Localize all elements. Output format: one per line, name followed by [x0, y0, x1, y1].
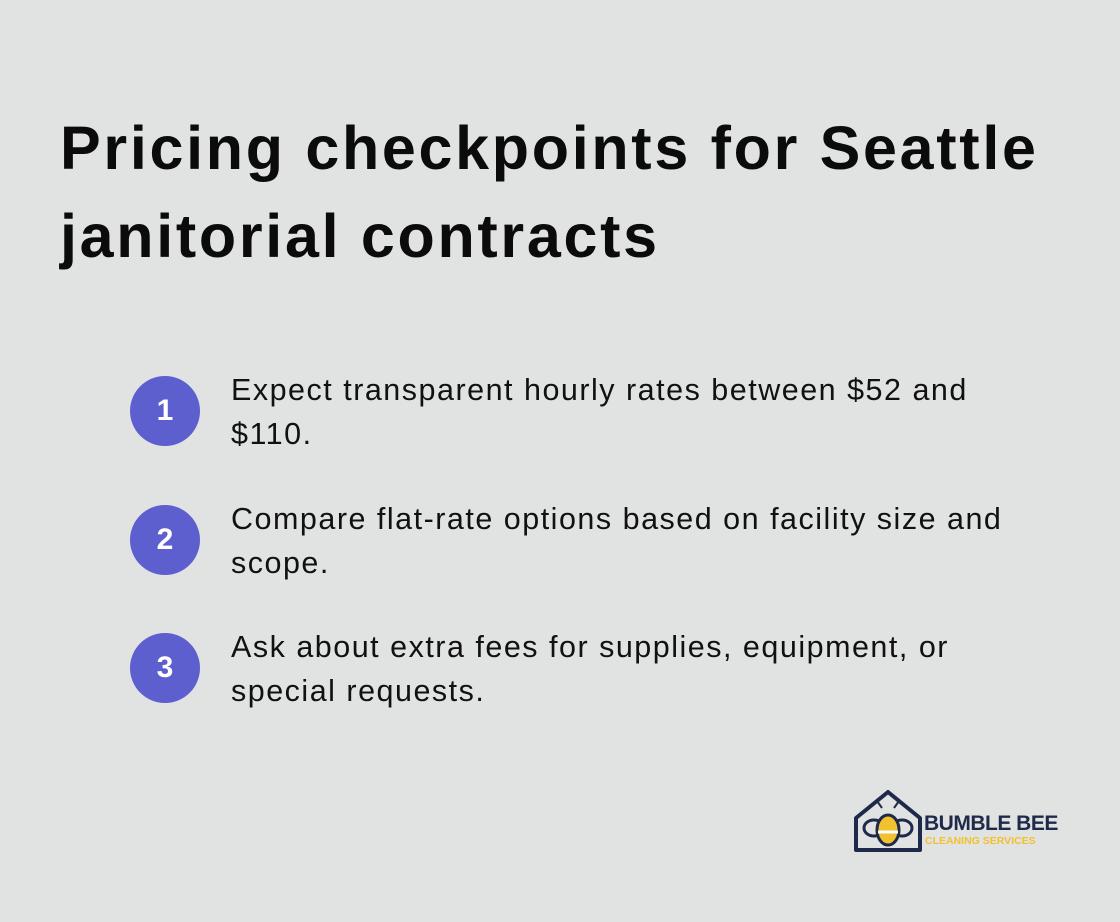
text 3: special requests.: [231, 674, 485, 708]
icon: bee house: [854, 790, 922, 852]
text 1: Expect transparent hourly rates between $52 and: [231, 373, 968, 407]
text 3: [231, 630, 949, 708]
text 1: $110.: [231, 417, 313, 451]
text 3: Ask about extra fees for supplies, equipment, or: [231, 630, 949, 664]
text 2: scope.: [231, 546, 330, 580]
text 2: [231, 502, 1002, 580]
logo: CLEANING SERVICES: [925, 835, 1036, 847]
number badge 1: [130, 376, 200, 446]
number badge 2: 2: [157, 523, 173, 556]
number badge 2: [130, 505, 200, 575]
title: janitorial contracts: [60, 202, 660, 270]
number badge 3: 3: [157, 651, 173, 684]
number badge 1: 1: [157, 394, 173, 427]
item 3: [130, 630, 949, 708]
title: Pricing checkpoints for Seattle: [60, 114, 1039, 182]
text 2: Compare flat-rate options based on facility size and: [231, 502, 1002, 536]
title: [59, 114, 1039, 270]
logo text: BUMBLE BEE: [924, 812, 1058, 835]
item 2: [130, 502, 1002, 580]
logo: [854, 790, 1058, 852]
item 1: [130, 373, 968, 451]
number badge 3: [130, 633, 200, 703]
text 1: [231, 373, 968, 451]
